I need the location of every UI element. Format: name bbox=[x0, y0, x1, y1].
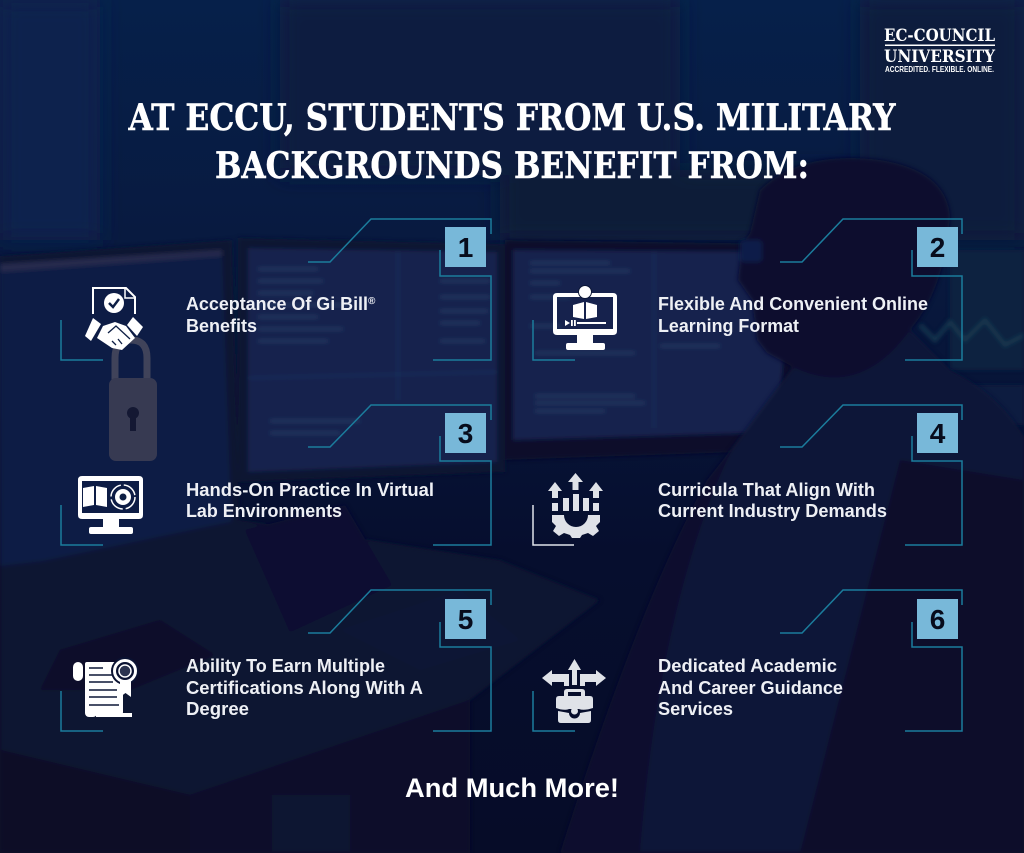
logo: EC-COUNCIL bbox=[884, 26, 995, 46]
left monitor bbox=[0, 240, 240, 590]
code lines bbox=[258, 262, 720, 434]
panel: benefit 2 bbox=[533, 219, 962, 360]
number badge 3 bbox=[445, 413, 486, 453]
number badge 6 bbox=[917, 599, 958, 639]
benefit 1 text: Acceptance Of Gi Bill bbox=[186, 294, 368, 314]
panel: benefit 1 bbox=[61, 219, 491, 360]
benefit 4 text: Current Industry Demands bbox=[658, 501, 887, 521]
logo bbox=[884, 26, 996, 74]
benefit 6 text bbox=[658, 656, 843, 719]
icon: growth gear bbox=[548, 473, 603, 538]
number badge 2: 2 bbox=[930, 232, 945, 263]
benefit 4 text bbox=[658, 480, 887, 521]
benefit 6 text: Services bbox=[658, 699, 733, 719]
card frame 6 bbox=[533, 590, 962, 731]
benefit 6 text: And Career Guidance bbox=[658, 678, 843, 698]
benefit 5 text: Certifications Along With A bbox=[186, 678, 423, 698]
title: AT ECCU, STUDENTS FROM U.S. MILITARY bbox=[128, 97, 897, 139]
icon: online learning monitor bbox=[553, 286, 617, 350]
number badge 5: 5 bbox=[458, 604, 473, 635]
benefit 6 text: Dedicated Academic bbox=[658, 656, 837, 676]
white corner 4 bbox=[533, 505, 574, 545]
title bbox=[128, 97, 897, 187]
benefit 1 text: ® bbox=[368, 296, 376, 307]
benefit 2 text: Flexible And Convenient Online bbox=[658, 294, 928, 314]
logo: ACCREDITED. FLEXIBLE. ONLINE. bbox=[885, 65, 994, 74]
logo: UNIVERSITY bbox=[884, 47, 996, 67]
keyboard bbox=[40, 620, 215, 690]
panel: benefit 3 bbox=[61, 405, 491, 545]
title: BACKGROUNDS BENEFIT FROM: bbox=[215, 145, 809, 187]
person silhouette bbox=[560, 158, 1024, 853]
number badge 5 bbox=[445, 599, 486, 639]
benefit 5 text: Degree bbox=[186, 699, 249, 719]
number badge 4 bbox=[917, 413, 958, 453]
middle monitor bbox=[238, 238, 505, 482]
icon: briefcase with arrows bbox=[542, 659, 606, 723]
benefit 2 text bbox=[658, 294, 928, 336]
number badge 4: 4 bbox=[930, 418, 946, 449]
icon: scroll certificate bbox=[73, 657, 139, 717]
card frame 4 bbox=[780, 405, 962, 545]
number badge 2 bbox=[917, 227, 958, 267]
benefit 5 text bbox=[186, 656, 423, 719]
card frame 1 bbox=[61, 219, 491, 360]
benefit 3 text: Hands-On Practice In Virtual bbox=[186, 480, 434, 500]
benefit 2 text: Learning Format bbox=[658, 316, 799, 336]
number badge 1 bbox=[445, 227, 486, 267]
card frame 2 bbox=[533, 219, 962, 360]
number badge 3: 3 bbox=[458, 418, 473, 449]
benefit 5 text: Ability To Earn Multiple bbox=[186, 656, 385, 676]
benefit 3 text bbox=[186, 480, 434, 521]
benefit 4 text: Curricula That Align With bbox=[658, 480, 875, 500]
panel: benefit 5 bbox=[61, 590, 491, 731]
padlock bbox=[109, 340, 157, 461]
number badge 1: 1 bbox=[458, 232, 473, 263]
hand area bbox=[340, 590, 520, 670]
benefit 1 text: Benefits bbox=[186, 316, 257, 336]
right monitor bbox=[505, 240, 800, 460]
closing line: And Much More! bbox=[405, 773, 619, 803]
card frame 3 bbox=[61, 405, 491, 545]
benefit 1 text bbox=[186, 294, 376, 336]
icon: virtual lab monitor bbox=[78, 476, 143, 534]
number badge 6: 6 bbox=[930, 604, 945, 635]
far right screen bbox=[950, 250, 1024, 370]
panel: benefit 4 bbox=[533, 405, 962, 545]
benefit 3 text: Lab Environments bbox=[186, 501, 342, 521]
desk surface bbox=[0, 520, 600, 795]
tablet bbox=[245, 505, 392, 632]
panel: benefit 6 bbox=[533, 590, 962, 731]
card frame 5 bbox=[61, 590, 491, 731]
icon: document and handshake bbox=[85, 288, 143, 350]
